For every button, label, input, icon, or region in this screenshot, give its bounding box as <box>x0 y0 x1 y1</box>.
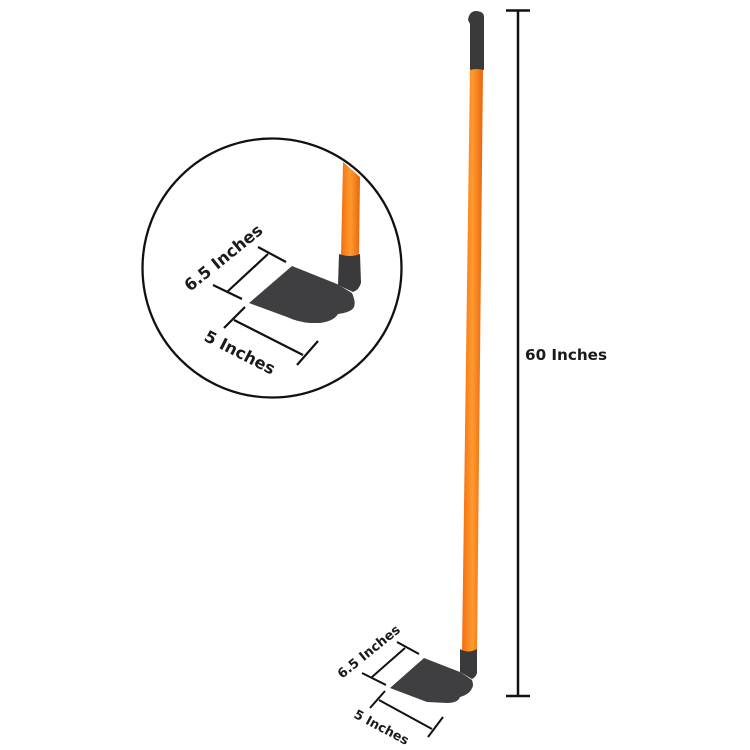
small width label: 6.5 Inches <box>335 622 404 682</box>
small length label: 5 Inches <box>351 707 411 749</box>
hoe: full tool <box>390 11 484 703</box>
detail circle <box>142 138 402 398</box>
detail length dimension <box>224 307 318 365</box>
grip <box>468 11 484 70</box>
collar <box>460 649 477 679</box>
label: 60 inches: 60 Inches <box>525 346 607 364</box>
pole <box>462 68 483 652</box>
detail width dimension <box>213 247 286 299</box>
detail collar <box>338 254 361 292</box>
detail length label: 5 Inches <box>201 327 278 379</box>
small width dimension <box>362 642 419 685</box>
blade <box>390 658 473 703</box>
small length dimension <box>370 691 443 737</box>
detail pole <box>341 162 360 256</box>
height dimension line <box>506 10 530 696</box>
circle outline <box>142 138 402 398</box>
detail blade <box>249 266 355 323</box>
detail width label: 6.5 Inches <box>181 221 266 295</box>
